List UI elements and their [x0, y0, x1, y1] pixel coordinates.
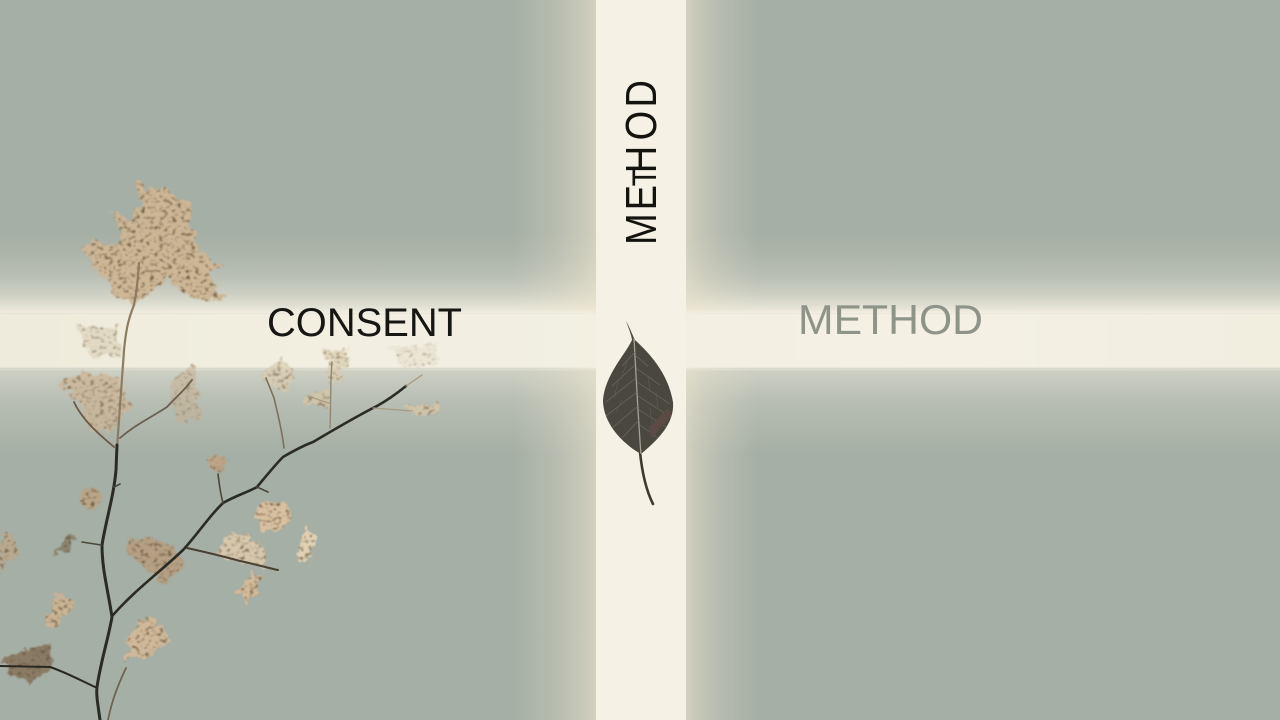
- horizontal light band: [0, 312, 1280, 369]
- plant: dried branch: [0, 178, 438, 720]
- label: METHOD vertical: O: [616, 111, 666, 140]
- label: METHOD vertical: T: [625, 168, 663, 186]
- leaf stem: [640, 452, 653, 504]
- leaf blade: [603, 321, 673, 454]
- leaf veins: [606, 338, 672, 455]
- label: CONSENT: CONSENT: [267, 301, 462, 345]
- icon: leaf: [603, 321, 673, 504]
- label: METHOD vertical: D: [616, 80, 666, 107]
- glow: left of vertical band: [515, 0, 597, 720]
- glow: above horizontal band: [0, 232, 1280, 313]
- label: METHOD vertical: E: [616, 185, 666, 210]
- label: METHOD vertical: H: [616, 146, 666, 173]
- vertical light band: [596, 0, 686, 720]
- glow: right of vertical band: [685, 0, 757, 720]
- flowers: [0, 178, 438, 682]
- label: METHOD horizontal: METHOD: [798, 296, 983, 343]
- label: METHOD vertical: M: [616, 213, 666, 245]
- glow: below horizontal band: [0, 369, 1280, 454]
- stems: [0, 263, 422, 720]
